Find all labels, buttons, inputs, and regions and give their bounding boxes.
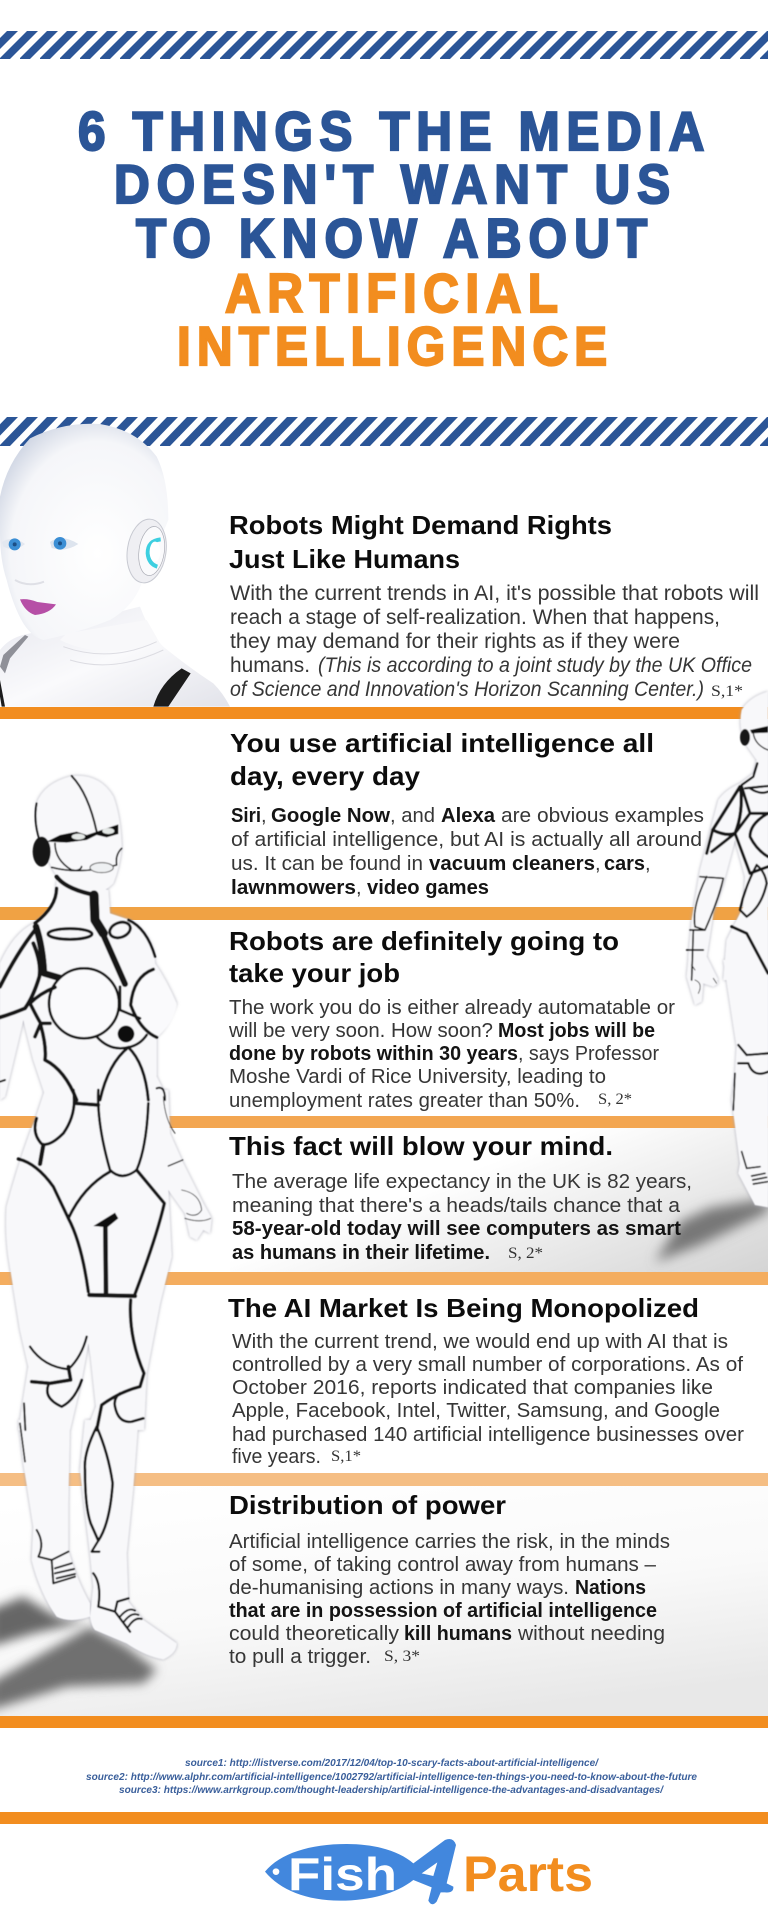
- body text: of artificial intelligence, but AI is actually all around: [231, 829, 702, 851]
- body text: [228, 997, 675, 1112]
- body text: that are in possession of artificial intelligence: [229, 1600, 657, 1622]
- illustration: robot head and shoulders: [0, 424, 230, 707]
- title: 6 THINGS THE MEDIA: [78, 102, 704, 163]
- icon: ear device: [123, 517, 170, 585]
- illustration: partial robot on the right: [687, 692, 768, 1207]
- panel: this fact will blow your mind: [229, 1131, 692, 1264]
- body text: Google Now: [271, 805, 390, 827]
- body text: , says Professor: [518, 1043, 659, 1065]
- body text: Apple, Facebook, Intel, Twitter, Samsung, and Google: [232, 1400, 720, 1422]
- heading: Robots Might Demand Rights: [229, 510, 612, 540]
- body text: [232, 1171, 692, 1264]
- head and torso markings: [0, 776, 177, 1100]
- body text: , and: [390, 805, 435, 827]
- body text: With the current trends in AI, it's possible that robots will: [230, 582, 759, 605]
- source links: [86, 1757, 697, 1796]
- body text: 58-year-old today will see computers as smart: [232, 1218, 681, 1240]
- logo: Fish4Parts: Fish: [288, 1848, 397, 1900]
- body text: Artificial intelligence carries the risk, in the minds: [229, 1531, 670, 1553]
- body text: S, 2*: [508, 1245, 543, 1262]
- body text: lawnmowers: [231, 877, 356, 899]
- body text: cars: [604, 853, 645, 875]
- body text: [229, 1531, 670, 1668]
- heading: Robots are definitely going to: [229, 926, 619, 956]
- body text: us. It can be found in: [231, 853, 423, 875]
- title: INTELLIGENCE: [177, 317, 607, 378]
- hip and thigh markings: [18, 1090, 211, 1430]
- body silhouette: [0, 776, 212, 1659]
- icon: lips: [20, 599, 56, 615]
- body text: humans.: [230, 654, 310, 677]
- body text: vacuum cleaners: [429, 853, 595, 875]
- heading: [229, 510, 612, 574]
- lower leg and foot markings: [20, 1423, 142, 1632]
- floor shading behind section 6: [0, 1486, 768, 1716]
- body text: reach a stage of self-realization. When that happens,: [230, 606, 720, 629]
- body text: Siri: [231, 805, 261, 827]
- body text: video games: [367, 877, 489, 899]
- body text: S,1*: [331, 1448, 361, 1465]
- body text: S, 2*: [598, 1091, 632, 1108]
- title: [78, 102, 704, 378]
- body text: [232, 1331, 744, 1468]
- body text: without needing: [517, 1623, 665, 1645]
- body text: The average life expectancy in the UK is 82 years,: [232, 1171, 692, 1193]
- heading: [229, 926, 619, 988]
- heading: [230, 728, 654, 791]
- body text: ,: [261, 805, 267, 827]
- icon: blue fish with 4 tail: [265, 1839, 456, 1904]
- heading: You use artificial intelligence all: [230, 728, 654, 758]
- body text: done by robots within 30 years: [229, 1043, 518, 1065]
- body text: S,1*: [711, 683, 743, 700]
- body text: are obvious examples: [501, 805, 704, 827]
- body text: Moshe Vardi of Rice University, leading to: [229, 1066, 606, 1088]
- body text: [230, 582, 759, 701]
- body text: With the current trend, we would end up with AI that is: [232, 1331, 728, 1353]
- body text: of some, of taking control away from humans –: [229, 1554, 657, 1576]
- floor shading behind section 4: [230, 1128, 768, 1272]
- heading: This fact will blow your mind.: [229, 1131, 613, 1161]
- illustration: full-body robot on the left: [0, 776, 212, 1659]
- body text: will be very soon. How soon?: [228, 1020, 493, 1042]
- body text: Alexa: [441, 805, 496, 827]
- logo: Fish4Parts: [265, 1839, 593, 1904]
- body text: meaning that there's a heads/tails chance that a: [232, 1195, 681, 1217]
- body text: ,: [645, 853, 651, 875]
- body text: as humans in their lifetime.: [232, 1242, 490, 1264]
- upper body markings: [687, 726, 768, 980]
- body text: S, 3*: [384, 1648, 420, 1665]
- panel: you use artificial intelligence: [230, 728, 704, 899]
- body text: to pull a trigger.: [229, 1646, 371, 1668]
- panel: the AI market is being monopolized: [228, 1293, 744, 1468]
- heading: The AI Market Is Being Monopolized: [228, 1293, 699, 1323]
- body text: could theoretically: [229, 1623, 399, 1645]
- heading: Just Like Humans: [229, 544, 460, 574]
- heading: day, every day: [230, 761, 421, 791]
- source links: source2: http://www.alphr.com/artificial-intelligence/1002792/artificial-intelligence-ten-things-you-need-to-know-about-the-future: [86, 1771, 697, 1783]
- panel: robots might demand rights: [229, 510, 759, 701]
- body text: kill humans: [404, 1623, 512, 1645]
- body text: de-humanising actions in many ways.: [229, 1577, 569, 1599]
- body text: unemployment rates greater than 50%.: [229, 1090, 580, 1112]
- heading: take your job: [229, 958, 400, 988]
- source links: source3: https://www.arrkgroup.com/thought-leadership/artificial-intelligence-the-advantages-and-disadvantages/: [119, 1784, 664, 1796]
- title: TO KNOW ABOUT: [136, 209, 647, 270]
- title: ARTIFICIAL: [225, 264, 558, 325]
- body text: five years.: [232, 1446, 321, 1468]
- source links: source1: http://listverse.com/2017/12/04/top-10-scary-facts-about-artificial-intelligence/: [185, 1757, 599, 1769]
- body silhouette: [687, 692, 768, 1207]
- body text: controlled by a very small number of corporations. As of: [232, 1354, 743, 1376]
- body text: October 2016, reports indicated that companies like: [232, 1377, 713, 1399]
- body text: Most jobs will be: [498, 1020, 655, 1042]
- heading: Distribution of power: [229, 1490, 506, 1520]
- icon: left eye: [2, 538, 25, 550]
- body text: of Science and Innovation's Horizon Scanning Center.): [230, 678, 704, 701]
- body text: ,: [356, 877, 362, 899]
- body text: ,: [595, 853, 601, 875]
- body text: they may demand for their rights as if they were: [230, 630, 680, 653]
- icon: right eye: [50, 537, 78, 550]
- body text: The work you do is either already automatable or: [229, 997, 675, 1019]
- body text: Nations: [575, 1577, 646, 1599]
- lower leg and hand markings: [692, 965, 768, 1184]
- panel: distribution of power: [229, 1490, 670, 1668]
- body text: [231, 805, 704, 899]
- title: DOESN'T WANT US: [114, 155, 670, 216]
- body text: had purchased 140 artificial intelligence businesses over: [232, 1424, 744, 1446]
- logo: Fish4Parts: Parts: [463, 1846, 593, 1902]
- panel: robots are going to take your job: [228, 926, 675, 1112]
